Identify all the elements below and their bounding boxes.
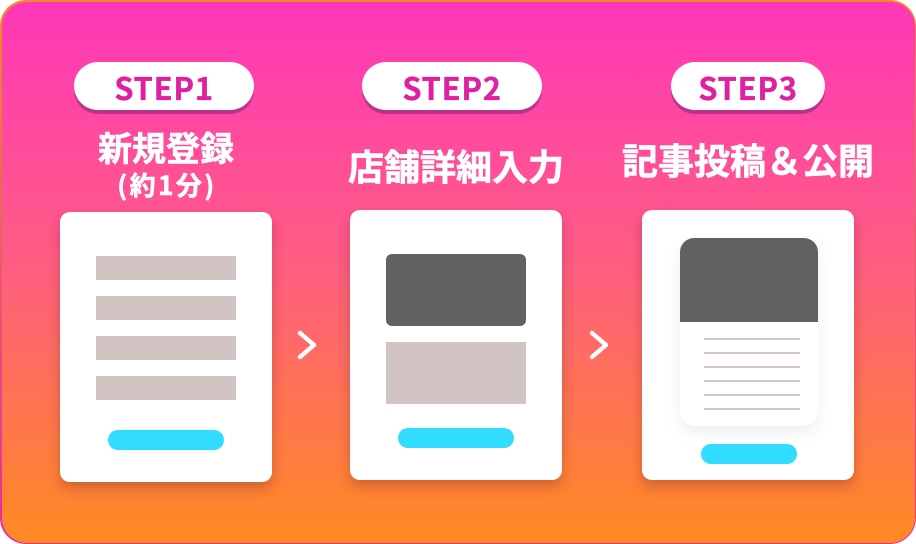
arrow: step 2 to step 3	[590, 330, 608, 360]
step 2 badge: STEP2	[402, 64, 502, 109]
form field 1	[96, 256, 236, 280]
step 2 heading: 店舗詳細入力	[348, 139, 564, 191]
arrow: step 1 to step 2	[298, 330, 316, 360]
form field 3	[96, 336, 236, 360]
publish button	[701, 444, 797, 464]
step 3 badge: STEP3	[698, 64, 798, 109]
step 2 badge	[362, 62, 542, 110]
step 1 duration note: (約1分)	[117, 166, 217, 203]
step 1 heading: 新規登録	[98, 122, 234, 171]
panel: step 1 registration form	[60, 212, 272, 482]
store image placeholder	[386, 254, 526, 326]
article hero image	[680, 238, 818, 322]
panel: step 3 article publishing	[642, 210, 854, 480]
article preview card	[680, 238, 818, 426]
submit button	[108, 430, 224, 450]
submit button	[398, 428, 514, 448]
form field 4	[96, 376, 236, 400]
step 3 badge	[671, 62, 825, 110]
step 1 badge: STEP1	[114, 64, 214, 109]
form field 2	[96, 296, 236, 320]
step 3 heading: 記事投稿＆公開	[622, 133, 874, 185]
article text lines	[704, 338, 800, 410]
panel: step 2 store details	[350, 210, 562, 480]
store description block	[386, 342, 526, 404]
step 1 badge	[74, 62, 254, 110]
